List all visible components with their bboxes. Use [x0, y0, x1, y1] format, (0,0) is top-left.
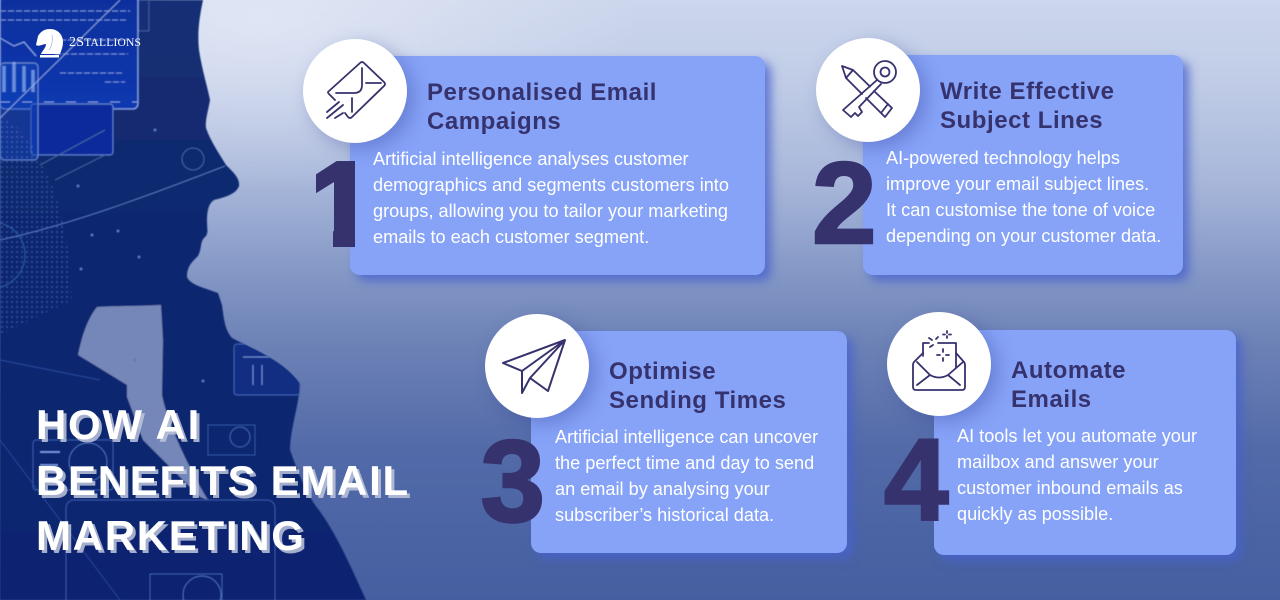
logo: 2Stallions	[36, 29, 141, 58]
title	[36, 401, 410, 559]
number 1: 1	[308, 138, 375, 272]
number 3: 3	[480, 416, 545, 546]
panel: write effective subject lines	[812, 36, 1196, 286]
panel: optimise sending times	[480, 314, 856, 562]
icon: key and pencil	[816, 38, 920, 142]
card 3 body text: an email by analysing your	[555, 479, 770, 499]
card 3 body text: the perfect time and day to send	[555, 453, 814, 473]
card 2 body text: depending on your customer data.	[886, 226, 1161, 246]
card 4 heading: Emails	[1011, 386, 1092, 412]
card 3 body text: subscriber’s historical data.	[555, 505, 774, 525]
card 1 body text: emails to each customer segment.	[373, 227, 649, 247]
card 4 heading	[1011, 357, 1126, 412]
number 4: 4	[884, 415, 949, 545]
card 4 body text: quickly as possible.	[957, 504, 1113, 524]
card 2 heading: Write Effective	[940, 78, 1115, 105]
logo wordmark: 2STALLIONS	[69, 35, 141, 50]
card 2 body text: improve your email subject lines.	[886, 174, 1149, 194]
card 4 background	[934, 330, 1236, 555]
panel: automate emails	[884, 312, 1245, 564]
HUD panels	[0, 0, 300, 600]
icon: open envelope with sparkles	[887, 312, 991, 416]
number 2: 2	[812, 138, 877, 268]
card 2 background	[863, 55, 1183, 275]
panel: personalised email campaigns	[302, 36, 778, 286]
card 4 body text	[957, 426, 1197, 524]
icon: horse head	[36, 29, 63, 58]
card 4 body text: AI tools let you automate your	[957, 426, 1197, 446]
card 2 body text: AI-powered technology helps	[886, 148, 1120, 168]
silhouette of a thinking person with HUD overlays	[0, 0, 366, 600]
card 3 heading	[609, 358, 786, 414]
card 3 body text	[555, 427, 818, 525]
silhouette body	[0, 0, 366, 600]
icon: paper plane	[485, 314, 589, 418]
card 1 heading: Campaigns	[427, 108, 561, 134]
card 1 heading	[427, 79, 657, 134]
card 2 heading: Subject Lines	[940, 106, 1103, 134]
card 3 heading: Sending Times	[609, 386, 786, 414]
card 4 body text: mailbox and answer your	[957, 452, 1159, 472]
card 1 background	[350, 56, 765, 275]
card 1 body text: Artificial intelligence analyses customer	[373, 149, 689, 169]
card 2 body text: It can customise the tone of voice	[886, 200, 1155, 220]
card 4 body text: customer inbound emails as	[957, 478, 1183, 498]
card 2 body text	[886, 148, 1161, 246]
card 1 body text: groups, allowing you to tailor your marketing	[373, 201, 728, 221]
card 3 background	[531, 331, 847, 553]
card 1 body text	[373, 149, 729, 247]
card 3 heading: Optimise	[609, 358, 716, 385]
card 1 heading: Personalised Email	[427, 79, 657, 106]
card 2 heading	[940, 78, 1115, 134]
card 3 body text: Artificial intelligence can uncover	[555, 427, 818, 447]
title: BENEFITS EMAIL	[36, 456, 410, 504]
card 4 heading: Automate	[1011, 357, 1126, 384]
card 1 body text: demographics and segments customers into	[373, 175, 729, 195]
title: HOW AI	[36, 401, 201, 448]
icon: flying envelope	[303, 39, 407, 143]
title: MARKETING	[36, 512, 306, 559]
